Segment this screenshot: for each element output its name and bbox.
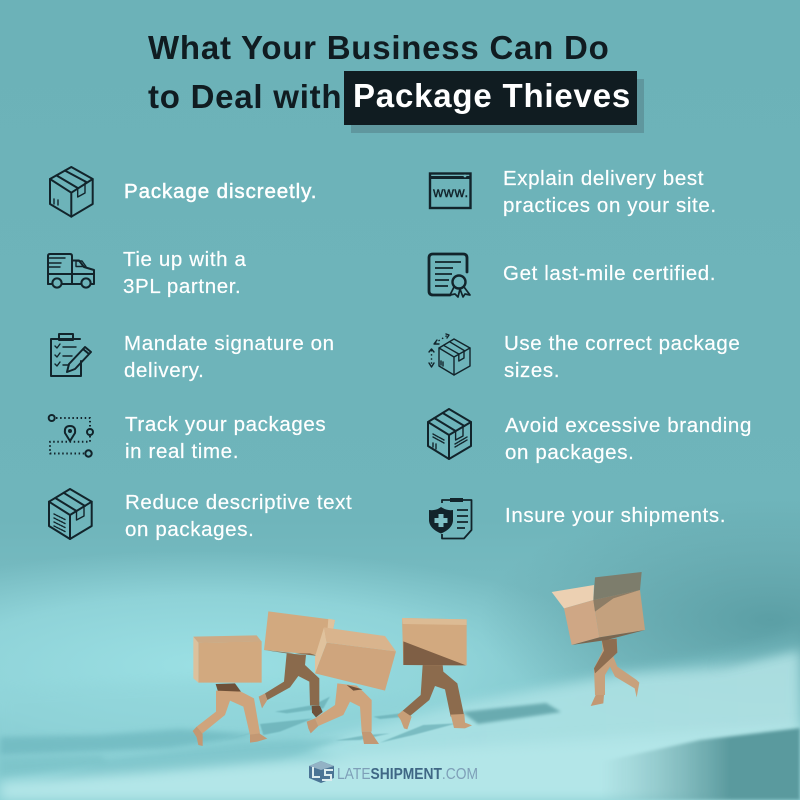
icon: website window: www.	[432, 184, 469, 200]
floor shadows	[203, 697, 457, 746]
figure 4: runner in shade	[397, 618, 472, 729]
icon: package with text	[49, 489, 92, 539]
highlight box	[344, 71, 637, 125]
icon: branded package	[428, 409, 471, 459]
logo: LateShipment.com	[309, 761, 478, 783]
text: descriptive text: Reduce descriptive text	[125, 491, 352, 514]
panel: right column tips	[428, 167, 758, 538]
text: track packages: Track your packages	[125, 413, 326, 436]
highlight shadow	[351, 79, 644, 133]
text: delivery best practices: Explain delivery best	[503, 167, 704, 190]
icon: insurance clipboard and shield	[429, 498, 472, 538]
icon: delivery truck	[48, 254, 94, 288]
legs	[594, 639, 639, 697]
text: mandate signature: Mandate signature on	[124, 332, 335, 355]
title line 1: What Your Business Can Do	[148, 29, 610, 66]
text: excessive branding: on packages.	[505, 441, 634, 464]
logo wordmark: LATESHIPMENT.COM	[337, 766, 478, 783]
illustration: walking boxes	[193, 611, 472, 746]
text: last-mile certified: Get last-mile certified.	[503, 262, 716, 285]
open box	[564, 600, 599, 645]
icon: package sizing	[429, 334, 470, 375]
icon: tracking route	[49, 415, 93, 457]
icon: certificate	[429, 254, 470, 297]
text: mandate signature: delivery.	[124, 359, 204, 382]
text: excessive branding: Avoid excessive branding	[505, 414, 752, 437]
text: 3PL partner: Tie up with a	[123, 248, 247, 271]
highlighted title text: Package Thieves	[353, 77, 631, 114]
text: descriptive text: on packages.	[125, 518, 254, 541]
text: insure shipments: Insure your shipments.	[505, 504, 726, 527]
figure 2: runner behind	[259, 611, 335, 717]
text: package discreetly: Package discreetly.	[124, 180, 317, 203]
panel: left column tips	[48, 167, 359, 541]
title line 2: to Deal with	[148, 78, 342, 115]
icon: package	[50, 167, 93, 217]
text: track packages: in real time.	[125, 440, 239, 463]
text: correct package sizes: sizes.	[504, 359, 560, 382]
title	[148, 29, 644, 133]
text: 3PL partner: 3PL partner.	[123, 275, 241, 298]
icon: clipboard checklist	[51, 334, 91, 376]
figure 3: runner with tilted box	[307, 627, 396, 744]
figure 1: runner in front	[193, 635, 267, 746]
icon: website window	[430, 174, 470, 208]
illustration: lone box carrier	[552, 572, 645, 706]
logo mark	[309, 761, 334, 783]
text: delivery best practices: practices on your site.	[503, 194, 717, 217]
text: correct package sizes: Use the correct package	[504, 332, 740, 355]
